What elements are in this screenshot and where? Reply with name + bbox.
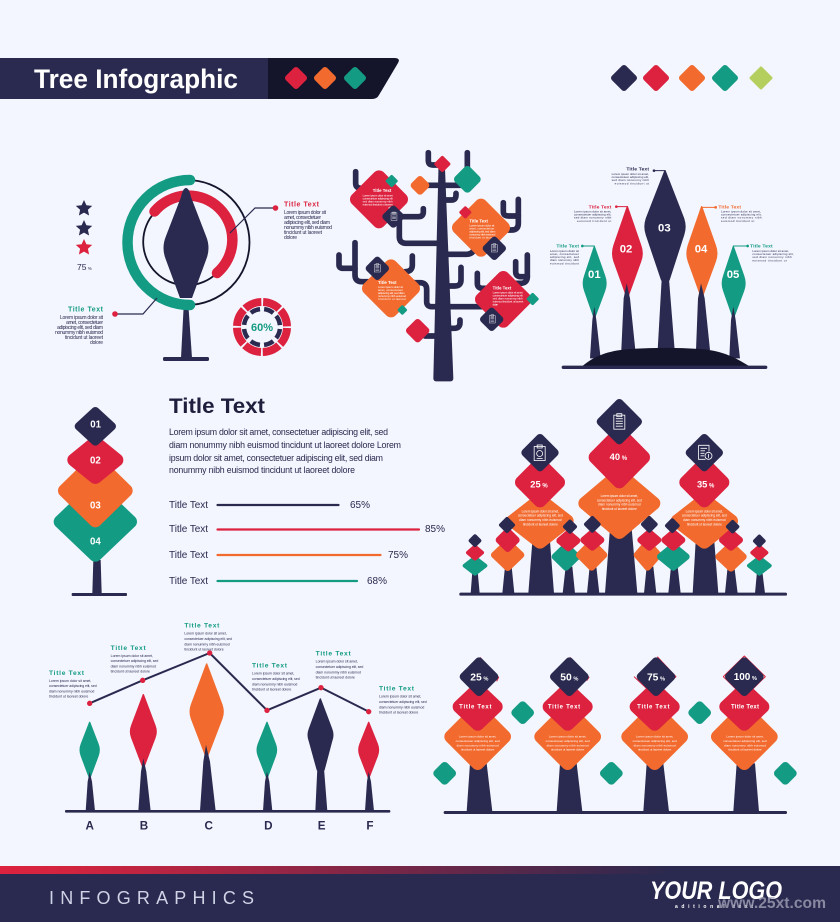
label C: diam nonummy nibh euismod — [184, 642, 230, 646]
leaf card: red right: euismod tincidunt ut laoreet — [493, 300, 524, 304]
trunks — [590, 279, 740, 358]
label 03: euismod tincidunt ut — [615, 181, 649, 185]
label D — [252, 663, 300, 691]
label F: tincidunt ut laoreet dolore — [379, 710, 418, 714]
tree: 75%: Lorem ipsum dolor sit amet, — [636, 735, 673, 739]
tree: 40%: tincidunt ut laoreet dolore — [602, 507, 637, 511]
tree: 100%: consectetuer adipiscing elit, sed — [723, 739, 767, 743]
tree: 25%: Lorem ipsum dolor sit amet, — [522, 509, 559, 513]
hill and ground line — [562, 348, 767, 369]
label D: consectetuer adipiscing elit, sed — [252, 677, 300, 681]
label 03: Lorem ipsum dolor sit amet, — [612, 172, 649, 176]
label A: consectetuer adipiscing elit, sed — [49, 684, 97, 688]
small trees — [465, 518, 770, 593]
body paragraph — [169, 427, 401, 475]
label 01: amet, consectetuer — [550, 252, 579, 256]
label 03: consectetuer adipiscing elit, — [612, 175, 649, 179]
tree: 40%: Lorem ipsum dolor sit amet, — [601, 494, 638, 498]
tree: 75%: tincidunt ut laoreet dolore — [638, 748, 672, 752]
label B: consectetuer adipiscing elit, sed — [111, 659, 158, 663]
tree: 25%: 25 % — [470, 673, 488, 684]
leaf card: red right: Title Text — [493, 286, 512, 291]
panel: five leaf trees — [550, 167, 794, 369]
ground line — [444, 811, 787, 814]
tree: 40%: diam nonummy nibh euismod — [598, 503, 641, 507]
leaf card: red top left: Title Text — [373, 188, 392, 193]
tree: 40% — [585, 403, 654, 593]
ground line — [459, 593, 787, 596]
leaf card: orange right: amet, consectetuer — [469, 226, 494, 230]
leaf card: red top left — [357, 177, 401, 222]
tree: 50%: 50 % — [560, 673, 578, 684]
tree: 35%: tincidunt ut laoreet dolore — [687, 522, 722, 526]
donut: 60%: 60% — [251, 322, 273, 334]
tree: 25%: Lorem ipsum dolor sit amet, — [459, 735, 496, 739]
label 01: adipiscing elit, sed — [550, 255, 579, 259]
tree: 75% — [628, 657, 681, 812]
tree: 100%: diam nonummy nibh euismod — [724, 743, 766, 747]
axis letters: C — [204, 819, 213, 832]
trunks — [86, 745, 374, 811]
label 01: euismod tincidunt — [550, 261, 579, 265]
axis letters: E — [318, 819, 326, 832]
callout: teal: Lorem ipsum dolor sit — [60, 315, 104, 321]
label F: consectetuer adipiscing elit, sed — [379, 700, 427, 704]
label F: Title Text — [379, 686, 415, 693]
label E: diam nonummy nibh euismod — [316, 670, 361, 674]
callout: red: adipiscing elit, sed diam — [284, 220, 330, 226]
callout: red — [230, 202, 332, 241]
progress bars: 65% — [350, 500, 370, 511]
axis letters: B — [140, 819, 148, 832]
leaf card: red top left: Lorem ipsum dolor sit amet — [363, 194, 393, 198]
label C: Lorem ipsum dolor sit amet, — [184, 632, 227, 636]
callout: teal: adipiscing elit, sed diam — [57, 325, 103, 331]
label 05: sed diam nonummy nibh — [752, 255, 792, 259]
tree: 50%: tincidunt ut laoreet dolore — [551, 748, 585, 752]
progress bars — [169, 500, 445, 587]
label A: Lorem ipsum dolor sit amet, — [49, 679, 91, 683]
leaf card: red right: sed diam nonummy nibh — [493, 297, 523, 301]
tree trunk and base — [181, 300, 192, 358]
leaf card: orange left: adipiscing elit, sed diam — [378, 291, 405, 295]
label 03 — [612, 167, 649, 185]
callouts — [581, 169, 749, 247]
panel: stacked diamond tree: 04 — [90, 537, 101, 548]
callout: red: dolore — [284, 235, 297, 241]
numbers: 05 — [727, 269, 739, 281]
panel: radial tree — [55, 180, 332, 361]
label 03: Title Text — [626, 167, 649, 173]
logo: YOUR LOGO — [650, 877, 782, 905]
tree: 25%: diam nonummy nibh euismod — [457, 743, 499, 747]
label F: diam nonummy nibh euismod — [379, 705, 424, 709]
leaf card: orange left: amet, consectetuer — [378, 288, 403, 292]
label B: tincidunt ut laoreet dolore — [111, 669, 150, 673]
callout: red: tincidunt ut laoreet — [284, 230, 323, 236]
red arc — [154, 196, 232, 273]
callout: teal — [55, 298, 157, 346]
header banner — [0, 58, 399, 99]
progress bars: Title Text — [169, 500, 208, 511]
numbers: 02 — [620, 244, 632, 256]
leaf card: orange left: tincidunt ut laoreet — [378, 297, 406, 301]
label C: tincidunt ut laoreet dolore — [184, 647, 224, 651]
tree: 100% — [718, 656, 771, 812]
tree: 100%: 100 % — [734, 672, 757, 683]
leaf card: orange right: adipiscing elit, sed diam — [469, 229, 496, 233]
axis letters: A — [85, 819, 94, 832]
tree: 25% — [451, 657, 504, 812]
label 02: Lorem ipsum dolor sit amet, — [574, 210, 611, 214]
label B: Lorem ipsum dolor sit amet, — [111, 654, 153, 658]
leaf card: red right: dolore — [493, 303, 498, 307]
leaf card: red top left: sed diam nonummy nibh — [363, 200, 393, 204]
tree: 40%: consectetuer adipiscing elit, sed — [597, 498, 642, 502]
panel: percentage trees — [437, 656, 793, 814]
tree: 25%: diam nonummy nibh euismod — [519, 518, 562, 522]
label 02: euismod tincidunt ut — [577, 219, 611, 223]
tree: 50% — [541, 657, 594, 812]
label A — [49, 670, 97, 698]
leaf card: red top left: consectetuer adipiscing elit — [363, 197, 393, 201]
tree: 100%: Lorem ipsum dolor sit amet, — [726, 735, 764, 739]
label 04: Lorem ipsum dolor sit amet, — [721, 210, 761, 214]
label 02: consectetuer adipiscing elit, — [574, 213, 611, 217]
label E: Title Text — [316, 651, 351, 658]
leaves — [583, 171, 745, 318]
callout: teal: nonummy nibh euismod — [55, 330, 103, 336]
leaf — [164, 188, 208, 298]
callout: red: nonummy nibh euismod — [284, 225, 332, 231]
label F — [379, 686, 427, 714]
leaf card: orange right: nonummy nibh euismod — [469, 232, 496, 236]
label 04 — [718, 204, 762, 223]
header diamonds — [288, 70, 363, 86]
callout: teal: Title Text — [68, 306, 104, 314]
tree: 35%: Lorem ipsum dolor sit amet, — [686, 509, 723, 513]
leaf card: orange left: nonummy nibh euismod — [378, 294, 406, 298]
label E: tincidunt ut laoreet dolore — [316, 675, 355, 679]
callout: teal: tincidunt ut laoreet — [65, 335, 104, 341]
leaf card: orange left — [369, 266, 413, 311]
body paragraph: Lorem ipsum dolor sit amet, consectetuer adipiscing elit, sed — [169, 427, 388, 437]
label 01: Title Text — [556, 243, 579, 249]
leaf card: red right: Lorem ipsum dolor sit amet — [493, 291, 523, 295]
panel: tree forest — [459, 403, 787, 596]
footer label: INFOGRAPHICS — [49, 888, 254, 908]
label B: diam nonummy nibh euismod — [111, 664, 156, 668]
rating stars — [76, 200, 92, 272]
label 01: Lorem ipsum dolor sit — [550, 249, 579, 253]
colour legend diamonds — [614, 68, 771, 88]
numbers: 03 — [658, 222, 671, 234]
thin rings — [187, 180, 250, 305]
label 04: consectetuer adipiscing elit, — [721, 213, 762, 217]
teal accent diamonds — [437, 705, 793, 781]
tree: 75%: Title Text — [637, 705, 669, 711]
tree: 50%: Title Text — [548, 705, 580, 711]
label C: Title Text — [184, 623, 220, 630]
label 02: sed diam nonummy nibh — [574, 216, 612, 220]
rating stars: 75 % — [77, 262, 92, 272]
donut: 60% — [237, 302, 287, 352]
title: Tree Infographic — [34, 64, 238, 94]
label 05: Title Text — [750, 243, 773, 249]
label B: Title Text — [111, 645, 146, 652]
label D: Title Text — [252, 663, 288, 670]
tree: 100%: tincidunt ut laoreet dolore — [728, 748, 762, 752]
small accent diamonds — [387, 158, 537, 339]
label D: Lorem ipsum dolor sit amet, — [252, 672, 294, 676]
label D: diam nonummy nibh euismod — [252, 682, 297, 686]
tree: 75%: diam nonummy nibh euismod — [634, 743, 676, 747]
leaf card: red top left: dolore — [388, 206, 393, 210]
heading: Title Text: Title Text — [169, 395, 265, 418]
leaf card: red right: consectetuer adipiscing elit — [493, 294, 523, 298]
label 01 — [550, 243, 579, 265]
label A: tincidunt ut laoreet dolore — [49, 694, 88, 698]
callout: teal: amet, consectetuer — [66, 320, 103, 326]
label C: consectetuer adipiscing elit, sed — [184, 637, 232, 641]
tree: 75%: 75 % — [647, 673, 665, 684]
tree: 25%: 25 % — [530, 480, 548, 490]
callout: red: Title Text — [284, 202, 320, 208]
label E — [316, 651, 363, 679]
label F: Lorem ipsum dolor sit amet, — [379, 695, 421, 699]
leaf card: orange right: tincidunt ut laoreet — [469, 235, 496, 239]
progress bars: Title Text — [169, 524, 208, 535]
label D: tincidunt ut laoreet dolore — [252, 687, 291, 691]
callout: red: Lorem ipsum dolor sit — [284, 210, 327, 216]
leaf card: orange right — [459, 205, 503, 250]
tree: 25%: consectetuer adipiscing elit, sed — [456, 739, 500, 743]
axis letters: D — [264, 819, 273, 832]
logo: aditional text — [675, 904, 753, 910]
axis letters: F — [366, 819, 374, 832]
panel: branching tree — [339, 153, 537, 381]
teal arc — [128, 180, 190, 305]
panel: stacked diamond tree — [60, 411, 130, 596]
label A: diam nonummy nibh euismod — [49, 689, 94, 693]
tree: 35% — [677, 438, 731, 593]
callout: red: amet, consectetuer — [284, 215, 321, 221]
panel: stacked diamond tree: 03 — [90, 500, 101, 511]
trend line — [87, 650, 371, 714]
label E: Lorem ipsum dolor sit amet, — [316, 660, 358, 664]
leaf card: red top left: euismod tincidunt ut laoreet — [363, 203, 393, 207]
leaf card: orange right: Lorem ipsum dolor sit — [469, 223, 495, 227]
tree: 50%: Lorem ipsum dolor sit amet, — [549, 735, 586, 739]
label 01: diam nonummy nibh — [550, 258, 579, 262]
icon badges: clipboards — [369, 209, 503, 328]
body paragraph: diam nonummy nibh euismod tincidunt ut laoreet dolore Lorem — [169, 440, 401, 450]
tree: 25%: tincidunt ut laoreet dolore — [461, 748, 495, 752]
numbers: 01 — [588, 269, 601, 281]
label B — [111, 645, 158, 673]
label 04: Title Text — [718, 204, 741, 210]
trunk — [433, 160, 453, 381]
tree: 100%: Title Text — [731, 705, 759, 711]
panel: stacked diamond tree: 02 — [90, 455, 101, 466]
tree: 25%: consectetuer adipiscing elit, sed — [518, 514, 563, 518]
label A: Title Text — [49, 670, 85, 677]
label C — [184, 623, 232, 651]
label 05: Lorem ipsum dolor sit amet, — [752, 249, 789, 253]
leaves — [80, 664, 378, 778]
leaf card: red right — [482, 278, 525, 321]
label 05: euismod tincidunt ut — [752, 258, 787, 262]
numbers: 04 — [695, 244, 708, 256]
axis letters — [85, 819, 374, 832]
panel: stacked diamond tree: 01 — [90, 420, 102, 431]
body paragraph: nonummy nibh euismod tincidunt ut laoreet dolore — [169, 465, 355, 475]
watermark: www.25xt.com — [717, 895, 826, 912]
tree: 40%: 40 % — [610, 452, 628, 462]
tree: 25% — [513, 438, 567, 593]
progress bars: 68% — [367, 576, 387, 587]
panel: line chart trees — [49, 623, 427, 832]
progress bars: Title Text — [169, 550, 208, 561]
numbers — [588, 222, 739, 281]
tree: 25%: Title Text — [459, 705, 491, 711]
tree: 50%: consectetuer adipiscing elit, sed — [546, 739, 590, 743]
progress bars: Title Text — [169, 576, 208, 587]
tree: 35%: 35 % — [697, 480, 715, 490]
leaf card: orange right: Title Text — [469, 218, 488, 223]
label 05 — [750, 243, 794, 262]
leaf card: orange left: Lorem ipsum dolor sit — [378, 285, 403, 289]
leaf card: orange left: Title Text — [378, 280, 397, 285]
callout: teal: dolore — [90, 340, 103, 346]
label 03: sed diam nonummy nibh — [612, 178, 649, 182]
label 04: sed diam nonummy nibh — [721, 216, 762, 220]
progress bars: 85% — [425, 524, 445, 535]
body paragraph: ipsum dolor sit amet, consectetuer adipiscing elit, sed diam — [169, 453, 383, 463]
label 02 — [574, 204, 612, 223]
tree: 75%: consectetuer adipiscing elit, sed — [633, 739, 677, 743]
branches — [339, 153, 527, 336]
label 04: euismod tincidunt ut — [721, 219, 754, 223]
tree: 35%: consectetuer adipiscing elit, sed — [682, 514, 727, 518]
ground line — [65, 810, 390, 813]
tree: 50%: diam nonummy nibh euismod — [547, 743, 589, 747]
progress bars: 75% — [388, 550, 408, 561]
footer band — [0, 866, 840, 922]
label 02: Title Text — [589, 204, 612, 210]
label 05: consectetuer adipiscing elit, — [752, 252, 794, 256]
label E: consectetuer adipiscing elit, sed — [316, 665, 363, 669]
tree: 25%: tincidunt ut laoreet dolore — [523, 522, 558, 526]
tree: 35%: diam nonummy nibh euismod — [683, 518, 726, 522]
